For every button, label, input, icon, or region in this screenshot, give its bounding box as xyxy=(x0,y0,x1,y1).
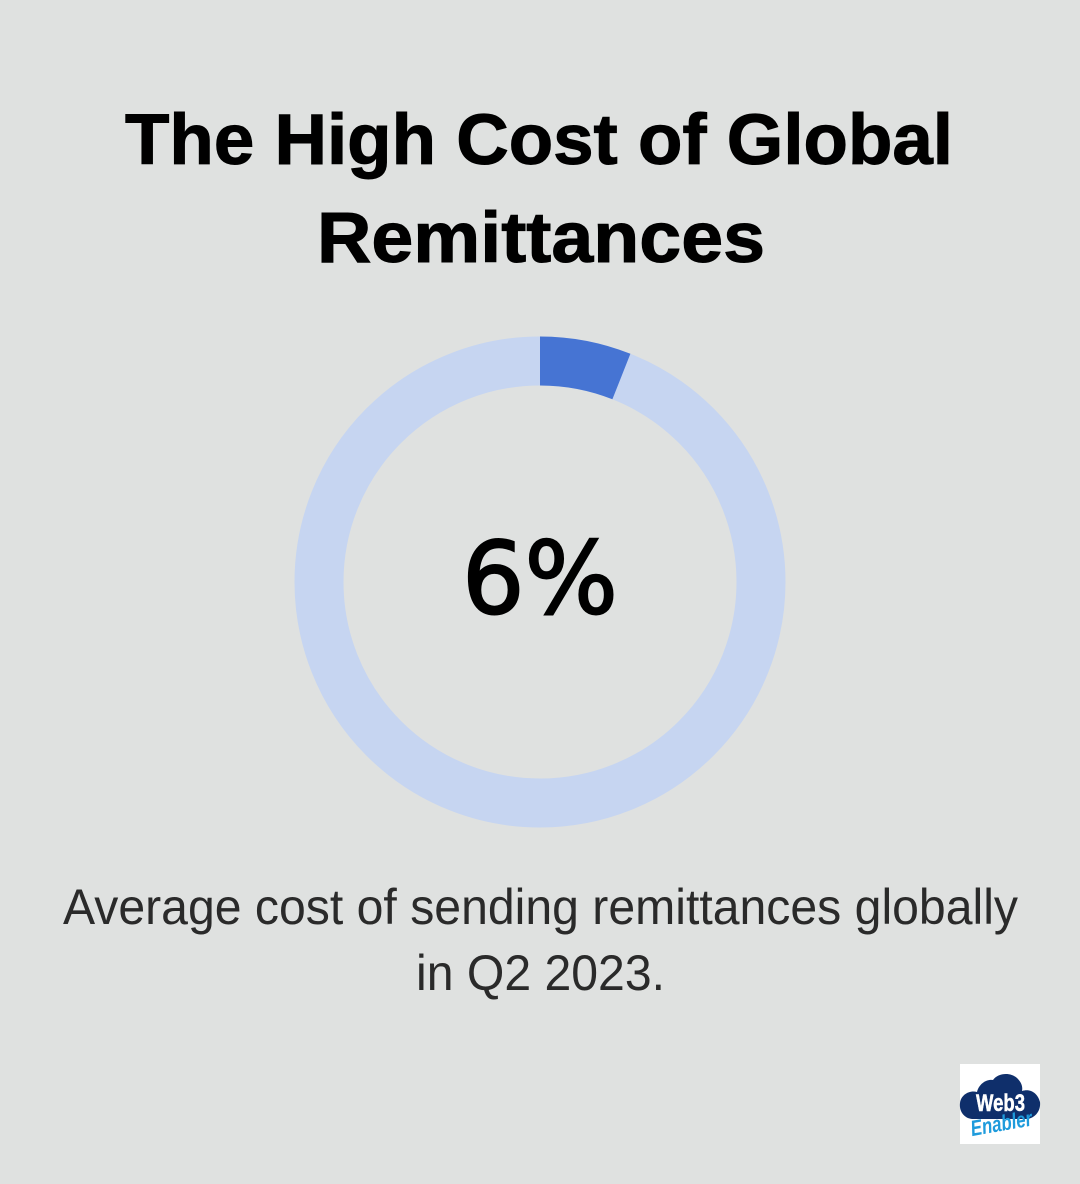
percentage value: 6% xyxy=(462,520,618,637)
caption: in Q2 2023. xyxy=(416,945,665,1001)
title xyxy=(125,101,953,278)
chart track xyxy=(319,361,761,803)
icon: cloud xyxy=(960,1074,1040,1119)
title: Remittances xyxy=(317,199,765,278)
logo: Web3 Enabler xyxy=(960,1064,1040,1144)
donut chart xyxy=(319,336,761,803)
caption: Average cost of sending remittances globally xyxy=(63,879,1018,935)
caption xyxy=(63,879,1018,1001)
logo word: Enabler: Enabler xyxy=(969,1105,1035,1141)
logo word: Web3: Web3 xyxy=(976,1090,1025,1117)
logo background xyxy=(960,1064,1040,1144)
title: The High Cost of Global xyxy=(125,101,953,180)
chart segment: 6% xyxy=(540,336,630,399)
